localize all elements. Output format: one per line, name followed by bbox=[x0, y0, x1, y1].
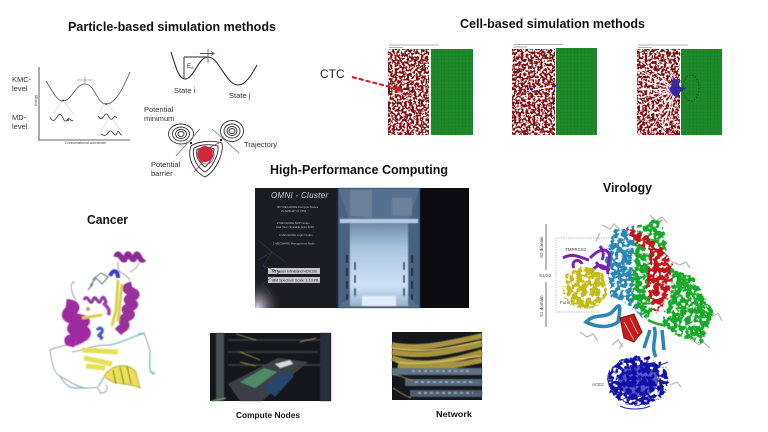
heading: cell-based simulation methods: Cell-based simulation methods bbox=[460, 16, 645, 31]
caption bbox=[513, 44, 563, 47]
display glow bbox=[255, 248, 305, 308]
MD curves bbox=[50, 114, 122, 135]
figure: spike protein complex bbox=[539, 215, 722, 409]
cell field background bbox=[637, 49, 680, 135]
deformed tissue bbox=[683, 75, 699, 101]
caption: compute nodes: Compute Nodes bbox=[236, 411, 301, 420]
MD label: level bbox=[12, 122, 28, 131]
photo: network cabling bbox=[392, 332, 482, 400]
cell field bbox=[388, 49, 429, 135]
barrier marker bbox=[77, 77, 93, 83]
diagram: potential wells and trajectory bbox=[144, 105, 277, 178]
glycans bbox=[580, 215, 722, 387]
cell field background bbox=[388, 49, 429, 135]
label: CTC: CTC bbox=[320, 67, 345, 81]
barrier height bar bbox=[184, 57, 208, 78]
heading: cancer: Cancer bbox=[87, 212, 128, 227]
switch rows bbox=[392, 368, 482, 375]
trajectory label: Trajectory bbox=[244, 140, 277, 149]
tissue grid bbox=[556, 48, 597, 135]
storage spec badge: IBM Spectrum Scale: 1.13 PB bbox=[272, 278, 319, 282]
ion bbox=[86, 307, 90, 311]
KMC label: KMC- bbox=[12, 75, 31, 84]
node list: Intel Xeon Scalable Gold 5218 bbox=[276, 225, 314, 229]
network spec badge: Mellanox InfiniBand HDR100 bbox=[272, 270, 317, 274]
teal chain bbox=[586, 226, 664, 357]
cell field bbox=[512, 49, 555, 135]
S2 domain label: S2 domain bbox=[539, 236, 544, 258]
right well contours bbox=[220, 120, 244, 142]
green chain bbox=[632, 220, 714, 344]
KMC label: level bbox=[12, 84, 28, 93]
potential barrier label: Potential bbox=[151, 160, 180, 169]
crossing marker bbox=[207, 49, 209, 63]
node list: 2 MEGWARE SMP Nodes bbox=[277, 221, 310, 225]
state j label: State j bbox=[229, 91, 251, 100]
barrier lines bbox=[176, 129, 239, 156]
heading: virology: Virology bbox=[603, 180, 653, 195]
domain bars bbox=[545, 224, 547, 327]
purple helices bbox=[116, 254, 144, 260]
blue ACE2 bbox=[608, 356, 668, 409]
ACE2 label: ACE2 bbox=[592, 382, 604, 387]
node list: 407 MEGWARE Compute Nodes bbox=[277, 205, 319, 209]
chart: KMC and MD energy levels bbox=[12, 67, 130, 145]
server tray bbox=[228, 358, 308, 401]
diagram: activation energy between states bbox=[171, 49, 257, 100]
potential minimum label: minimum bbox=[144, 114, 174, 123]
crossing arrow bbox=[200, 52, 214, 56]
CTC end markers bbox=[530, 86, 556, 89]
red chain bbox=[620, 228, 672, 342]
panel: cell simulation frame 3 bbox=[637, 45, 722, 135]
photo: compute nodes bbox=[210, 333, 331, 401]
yellow fibre bundles bbox=[392, 336, 482, 368]
central well contours bbox=[190, 141, 222, 177]
photo background bbox=[255, 188, 469, 308]
network spec badge bbox=[268, 268, 320, 274]
photo: OMNI cluster bbox=[255, 188, 469, 308]
network motif bbox=[258, 240, 285, 296]
tissue grid bbox=[681, 49, 722, 135]
yellow sheets bbox=[82, 280, 122, 326]
furin label: Furin bbox=[560, 300, 571, 305]
S1/S2 label: S1/S2 bbox=[539, 273, 552, 278]
ligand bbox=[88, 273, 108, 290]
MD label: MD- bbox=[12, 113, 26, 122]
cluster name: OMNI - Cluster bbox=[271, 191, 328, 200]
grey and cyan loops bbox=[50, 258, 155, 393]
purple TMPRSS2 bbox=[563, 246, 610, 274]
activation energy label: A bbox=[191, 65, 194, 70]
state curve bbox=[171, 52, 257, 85]
storage spec badge bbox=[268, 277, 320, 283]
cell field background bbox=[512, 49, 555, 135]
left well contours bbox=[168, 124, 194, 144]
protein: cancer structure bbox=[50, 254, 155, 393]
axes bbox=[39, 67, 130, 140]
panel: cell simulation frame 2 bbox=[512, 44, 597, 135]
heading: high-performance computing: High-Performance Computing bbox=[270, 162, 448, 177]
panel: cell simulation frame 1 bbox=[388, 45, 473, 135]
potential barrier label: barrier bbox=[151, 169, 173, 178]
arrow: CTC pointer bbox=[352, 77, 404, 92]
minimum markers bbox=[63, 100, 106, 120]
rack background bbox=[210, 333, 331, 401]
cell field bbox=[637, 49, 680, 135]
node list: 4 MEGWARE Login Nodes bbox=[279, 233, 313, 237]
activation energy label: E bbox=[187, 64, 191, 70]
TMPRSS2 label: TMPRSS2 bbox=[565, 247, 587, 252]
node list: 2 MEGWARE Management Node bbox=[273, 242, 315, 246]
potential minimum label: Potential bbox=[144, 105, 173, 114]
projection cones bbox=[51, 101, 122, 132]
state i label: State i bbox=[174, 86, 196, 95]
caption bbox=[389, 45, 439, 48]
caption bbox=[638, 45, 688, 48]
saddle points bbox=[191, 140, 221, 143]
coordinate axis label: Conformational coordinate bbox=[65, 141, 106, 145]
radial tracks bbox=[638, 52, 675, 132]
dashed box bbox=[556, 238, 617, 312]
node list: 2x AMD EPYC 7452 bbox=[281, 209, 307, 213]
migration track bbox=[532, 86, 555, 90]
tumour invasion cluster bbox=[668, 77, 686, 98]
S1 domain label: S1 domain bbox=[539, 295, 544, 317]
node list bbox=[273, 205, 319, 246]
KMC energy curve bbox=[46, 72, 130, 104]
rack background bbox=[392, 332, 482, 400]
blue helices bbox=[110, 271, 118, 278]
energy axis label: Energy bbox=[34, 95, 38, 106]
red trajectory bbox=[194, 142, 221, 172]
yellow furin bbox=[563, 267, 607, 309]
caption: network: Network bbox=[436, 410, 473, 419]
heading: particle-based simulation methods: Particle-based simulation methods bbox=[68, 19, 276, 34]
left display panel bbox=[255, 188, 338, 308]
cluster aisle bbox=[338, 188, 420, 308]
tissue grid bbox=[431, 49, 473, 135]
